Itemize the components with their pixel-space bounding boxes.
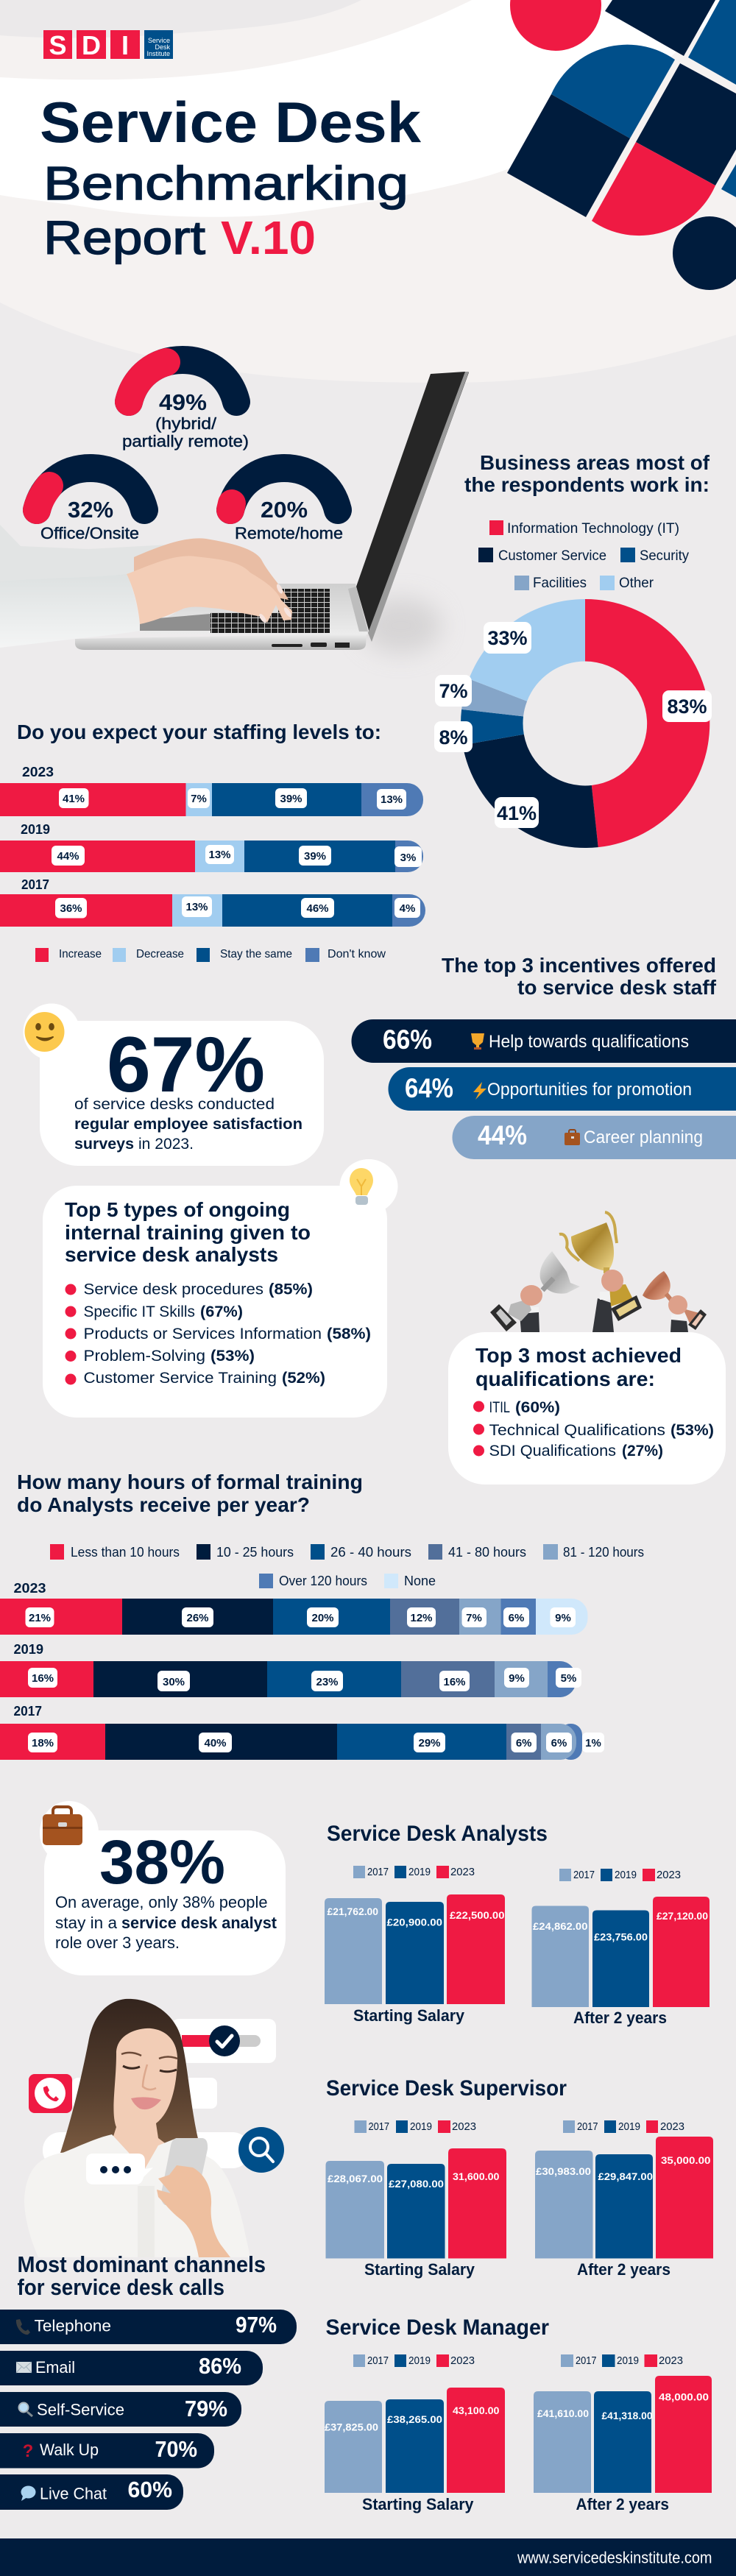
list: qualifications bbox=[473, 1399, 714, 1459]
SDI logo bbox=[43, 30, 173, 60]
ui card: search bbox=[43, 2127, 284, 2173]
legend: 2019 bbox=[408, 1866, 431, 1878]
card: 67% satisfaction surveys: of service desks conducted bbox=[74, 1096, 275, 1113]
chart: analysts starting salary bbox=[325, 1866, 505, 2025]
icon: light bulb bbox=[350, 1168, 373, 1205]
stacked bars: training hours bbox=[0, 1581, 604, 1760]
training 2019: 9% bbox=[509, 1672, 525, 1685]
staffing 2023: 39% bbox=[280, 793, 302, 805]
gold trophy bbox=[559, 1212, 642, 1321]
legend: 2017 bbox=[577, 2120, 598, 2133]
donut label 7%: 7% bbox=[439, 680, 468, 702]
legend: 2023 bbox=[450, 1866, 475, 1878]
channel bar: live chat 60% bbox=[0, 2474, 183, 2510]
list: training types bbox=[65, 1281, 371, 1387]
shape: lower blue square bbox=[721, 164, 736, 197]
donut: IT 83% bbox=[585, 599, 710, 847]
laptop lid edge bbox=[368, 372, 469, 642]
legend: 2017 bbox=[367, 2354, 389, 2367]
chart: supervisor starting salary bbox=[325, 2120, 506, 2279]
card: 38% stay in role: service desk analyst bbox=[121, 1914, 277, 1932]
list: training types: (58%) bbox=[327, 1326, 371, 1342]
laptop base bbox=[75, 634, 367, 650]
back hand bbox=[134, 538, 289, 600]
footer bar bbox=[0, 2538, 736, 2576]
ui card: slider bbox=[171, 2019, 276, 2063]
sleeves bbox=[520, 1298, 688, 1332]
heading: business areas: Business areas most of bbox=[480, 451, 710, 474]
legend: 2019 bbox=[408, 2354, 431, 2367]
training 2017: 6% bbox=[551, 1737, 567, 1749]
staffing 2023: 2023 bbox=[22, 765, 54, 779]
white bump behind bulb bbox=[340, 1159, 397, 1214]
training 2019: 16% bbox=[32, 1672, 54, 1685]
stacked bars: staffing levels bbox=[0, 765, 425, 927]
front sleeve bbox=[0, 574, 140, 648]
icon: trophy bbox=[471, 1033, 484, 1050]
legend: business areas: Security bbox=[640, 548, 689, 564]
staffing 2023 bbox=[0, 765, 423, 816]
keyboard bbox=[210, 589, 330, 633]
legend: 2017 bbox=[368, 2120, 389, 2133]
training 2023: 21% bbox=[29, 1612, 51, 1624]
list: training types: Specific IT Skills bbox=[84, 1303, 195, 1320]
SDI logo: Desk bbox=[155, 43, 170, 51]
training 2017 bbox=[0, 1704, 604, 1760]
list: training types: (67%) bbox=[200, 1303, 243, 1320]
legend: training hours: 10 - 25 hours bbox=[216, 1545, 294, 1560]
chart: manager starting salary: £37,825.00 bbox=[325, 2421, 378, 2433]
legend: business areas: Information Technology (IT) bbox=[507, 521, 679, 537]
channel bar: walk up 70%: Walk Up bbox=[40, 2441, 99, 2459]
list: qualifications: (60%) bbox=[515, 1399, 560, 1416]
card: top 5 training types: service desk analysts bbox=[65, 1243, 278, 1266]
channel bar: email 86% bbox=[0, 2351, 263, 2385]
SDI logo: Institute bbox=[146, 50, 170, 57]
donut label 41% bbox=[495, 797, 539, 828]
training 2019 bbox=[0, 1642, 581, 1697]
chat bubble bbox=[86, 2154, 153, 2184]
incentive bar: promotion 64%: Opportunities for promotion bbox=[487, 1080, 692, 1100]
icon: magnifier bbox=[19, 2402, 32, 2416]
cuffs bbox=[524, 1292, 687, 1320]
incentive bar: promotion 64%: 64% bbox=[405, 1073, 453, 1103]
training 2019: 23% bbox=[316, 1676, 339, 1688]
chart: manager after 2 years: £41,318.00 bbox=[602, 2410, 653, 2421]
gauge: 49% hybrid: partially remote) bbox=[122, 432, 249, 450]
gauge: 20% remote: Remote/home bbox=[235, 524, 343, 542]
card: top 5 training types: Top 5 types of ongoing bbox=[65, 1198, 290, 1221]
card: 38% stay in role bbox=[40, 1801, 286, 1975]
channel bar: email 86%: 86% bbox=[199, 2353, 241, 2379]
legend: business areas: Facilities bbox=[533, 576, 587, 591]
laptop ports bbox=[272, 643, 350, 648]
heading: top 3 incentives: The top 3 incentives offered bbox=[442, 954, 716, 977]
title bbox=[40, 90, 422, 264]
card: 38% stay in role: role over 3 years. bbox=[55, 1933, 180, 1952]
chart: manager starting salary: £38,265.00 bbox=[387, 2413, 442, 2425]
ui card: phone call bbox=[29, 2074, 217, 2113]
heading: service desk manager: Service Desk Manager bbox=[325, 2315, 549, 2340]
legend: 2017 bbox=[576, 2354, 596, 2367]
face and neck bbox=[110, 2028, 177, 2171]
card: 67% satisfaction surveys: 67% bbox=[107, 1020, 265, 1108]
staffing 2019: 3% bbox=[400, 852, 416, 864]
channel bar: telephone 97%: Telephone bbox=[34, 2317, 111, 2335]
heading: dominant channels: for service desk calls bbox=[18, 2274, 224, 2300]
list: qualifications: Technical Qualifications bbox=[489, 1422, 665, 1439]
chart: manager after 2 years bbox=[534, 2354, 712, 2513]
chart: supervisor starting salary: Starting Salary bbox=[364, 2260, 475, 2279]
legend: training hours: 26 - 40 hours bbox=[330, 1545, 411, 1560]
chart: supervisor after 2 years: 35,000.00 bbox=[661, 2154, 711, 2166]
card: 38% stay in role: On average, only 38% people bbox=[55, 1893, 268, 1911]
legend: training hours bbox=[50, 1544, 644, 1588]
hand and arm bbox=[157, 2165, 230, 2257]
laptop and hands photo bbox=[0, 372, 469, 654]
donut label 83% bbox=[662, 690, 712, 722]
shape: red arch bbox=[592, 142, 715, 236]
SDI logo: Service bbox=[148, 37, 170, 44]
list: training types: (53%) bbox=[210, 1348, 255, 1365]
card: top 3 qualifications: qualifications are: bbox=[475, 1367, 655, 1390]
incentive bar: career planning 44%: 44% bbox=[478, 1120, 527, 1150]
heading: business areas: the respondents work in: bbox=[464, 473, 710, 496]
trackpad bbox=[140, 612, 228, 631]
chart: analysts after 2 years: £23,756.00 bbox=[594, 1931, 648, 1943]
list: training types: Problem-Solving bbox=[84, 1348, 205, 1365]
laptop deck bbox=[140, 584, 368, 634]
legend bbox=[353, 1866, 475, 1878]
card: 38% stay in role: stay in a bbox=[55, 1914, 118, 1932]
nose shadow bbox=[143, 2064, 156, 2090]
channel bar: live chat 60%: Live Chat bbox=[40, 2485, 107, 2502]
legend: business areas bbox=[478, 520, 689, 591]
training 2023: 20% bbox=[311, 1612, 334, 1624]
training 2017: 29% bbox=[418, 1737, 441, 1749]
training 2023: 7% bbox=[466, 1612, 482, 1624]
incentive bar: qualifications 66%: Help towards qualifications bbox=[489, 1032, 689, 1052]
training 2017: 1% bbox=[585, 1737, 601, 1749]
SDI logo: S bbox=[49, 30, 67, 60]
channel bar: walk up 70%: 70% bbox=[155, 2436, 197, 2462]
heading: dominant channels: Most dominant channels bbox=[18, 2251, 266, 2277]
legend: 2023 bbox=[660, 2120, 684, 2133]
SDI logo: D bbox=[82, 30, 101, 60]
chart: supervisor starting salary: £28,067.00 bbox=[328, 2173, 383, 2184]
list: training types: (52%) bbox=[282, 1370, 325, 1387]
chart: supervisor after 2 years: After 2 years bbox=[577, 2260, 670, 2279]
SDI logo: I bbox=[121, 30, 129, 60]
chart: analysts starting salary: £22,500.00 bbox=[450, 1909, 505, 1921]
bronze trophy bbox=[643, 1271, 707, 1330]
card: 67% satisfaction surveys bbox=[24, 1004, 324, 1166]
woman with phone illustration bbox=[24, 1999, 284, 2257]
shape: top blue square bbox=[688, 0, 736, 85]
staffing 2017: 2017 bbox=[21, 877, 49, 892]
donut: facilities 7% bbox=[461, 679, 527, 716]
chart: analysts starting salary: Starting Salary bbox=[353, 2006, 465, 2025]
legend: 2019 bbox=[410, 2120, 432, 2133]
training 2017: 40% bbox=[204, 1737, 227, 1749]
staffing 2019 bbox=[0, 822, 423, 872]
chart: supervisor starting salary: 31,600.00 bbox=[453, 2170, 500, 2182]
chart: manager after 2 years: £41,610.00 bbox=[537, 2407, 589, 2419]
channel bar: telephone 97%: 97% bbox=[236, 2312, 277, 2338]
chart: analysts after 2 years: £27,120.00 bbox=[657, 1910, 708, 1922]
title: Service Desk bbox=[40, 90, 422, 155]
donut label 41%: 41% bbox=[497, 802, 537, 824]
heading: training hours bbox=[17, 1471, 363, 1516]
legend: staffing levels bbox=[35, 948, 386, 962]
laptop hinge bbox=[348, 587, 368, 631]
training 2017: 6% bbox=[516, 1737, 532, 1749]
card: 67% satisfaction surveys: in 2023. bbox=[138, 1136, 194, 1153]
shape: right navy square bbox=[636, 63, 736, 185]
staffing 2017: 46% bbox=[306, 902, 329, 915]
icon: briefcase bbox=[565, 1130, 580, 1145]
gauge: 49% hybrid: 49% bbox=[159, 389, 207, 415]
mouth bbox=[131, 2097, 161, 2109]
gauge: 20% remote bbox=[230, 468, 343, 542]
legend bbox=[563, 2120, 684, 2133]
title: V.10 bbox=[221, 211, 316, 264]
legend bbox=[561, 2354, 683, 2367]
hero geometric shapes bbox=[507, 0, 736, 290]
staffing 2019: 2019 bbox=[21, 822, 50, 837]
channel bar: self-service 79%: Self-Service bbox=[37, 2401, 124, 2418]
laptop shadow bbox=[361, 598, 442, 654]
footer bar: www.servicedeskinstitute.com bbox=[517, 2548, 712, 2567]
legend: training hours: None bbox=[404, 1574, 436, 1588]
chart: analysts after 2 years: £24,862.00 bbox=[533, 1920, 588, 1932]
icon: speech balloon bbox=[21, 2486, 35, 2501]
channel bar: telephone 97% bbox=[0, 2310, 297, 2344]
heading: top 3 incentives: to service desk staff bbox=[517, 976, 717, 999]
list: qualifications: (53%) bbox=[670, 1422, 714, 1439]
legend: training hours: 41 - 80 hours bbox=[448, 1545, 526, 1560]
chart: supervisor after 2 years: £30,983.00 bbox=[536, 2165, 591, 2177]
list: training types: Customer Service Training bbox=[84, 1370, 277, 1387]
staffing 2019: 44% bbox=[57, 850, 79, 863]
list: qualifications: ITIL bbox=[489, 1399, 510, 1416]
title: Benchmarking bbox=[43, 157, 408, 210]
legend: staffing levels: Stay the same bbox=[220, 948, 292, 960]
legend: staffing levels: Decrease bbox=[136, 948, 184, 960]
incentive bar: qualifications 66%: 66% bbox=[383, 1025, 432, 1055]
gauge: 49% hybrid: (hybrid/ bbox=[155, 414, 217, 433]
legend: 2019 bbox=[617, 2354, 639, 2367]
heading: business areas bbox=[464, 451, 710, 496]
white bump behind briefcase bbox=[40, 1801, 99, 1864]
card: top 5 training types: internal training given to bbox=[65, 1221, 311, 1244]
heading: training hours: How many hours of formal training bbox=[17, 1471, 363, 1493]
legend: business areas: Other bbox=[619, 576, 654, 591]
donut label 33% bbox=[484, 622, 531, 654]
shape: blue arch bbox=[551, 45, 675, 138]
staffing 2017: 13% bbox=[185, 901, 208, 913]
chart: analysts starting salary: £21,762.00 bbox=[327, 1906, 378, 1917]
incentive bar: qualifications 66% bbox=[352, 1019, 736, 1063]
training 2017: 2017 bbox=[13, 1704, 42, 1719]
heading: training hours: do Analysts receive per year? bbox=[17, 1493, 310, 1516]
chart: manager after 2 years: After 2 years bbox=[576, 2495, 669, 2513]
legend bbox=[353, 2354, 475, 2367]
heading: top 3 incentives bbox=[442, 954, 717, 999]
staffing 2017: 4% bbox=[400, 902, 415, 915]
staffing 2023: 41% bbox=[63, 793, 85, 805]
channel bar: self-service 79% bbox=[0, 2392, 241, 2427]
icon: smiley bbox=[25, 1012, 65, 1052]
training 2019: 2019 bbox=[13, 1642, 43, 1657]
donut label 8%: 8% bbox=[439, 726, 468, 749]
donut label 83%: 83% bbox=[667, 696, 707, 718]
icon: telephone bbox=[16, 2319, 30, 2335]
donut: other 33% bbox=[469, 599, 585, 701]
icon: lightning bbox=[473, 1082, 486, 1100]
title: Report bbox=[43, 211, 205, 264]
donut: customer service 41% bbox=[463, 735, 598, 848]
legend: staffing levels: Increase bbox=[59, 948, 102, 960]
chart: manager starting salary bbox=[325, 2354, 505, 2513]
shape: navy circle bbox=[673, 216, 736, 290]
phone bbox=[161, 2138, 208, 2205]
staffing 2019: 13% bbox=[208, 849, 231, 861]
chart: analysts starting salary: £20,900.00 bbox=[387, 1917, 442, 1928]
legend: 2017 bbox=[573, 1869, 595, 1881]
incentive bar: career planning 44% bbox=[452, 1116, 736, 1159]
gauge: 49% hybrid bbox=[122, 360, 249, 450]
eyes and brows bbox=[121, 2053, 177, 2072]
legend: 2023 bbox=[659, 2354, 683, 2367]
gauge: 32% office bbox=[37, 468, 144, 542]
staffing 2023: 7% bbox=[191, 793, 207, 805]
shirt placket bbox=[138, 2186, 155, 2257]
gauge: 32% office: Office/Onsite bbox=[40, 524, 139, 542]
chart: analysts after 2 years: After 2 years bbox=[573, 2009, 667, 2027]
chart: supervisor after 2 years: £29,847.00 bbox=[598, 2170, 653, 2182]
list: training types: Service desk procedures bbox=[84, 1281, 263, 1298]
shape: red circle bbox=[510, 0, 601, 51]
channel bar: email 86%: Email bbox=[35, 2358, 75, 2377]
legend: 2023 bbox=[450, 2354, 475, 2367]
donut chart: business areas bbox=[434, 599, 712, 848]
laptop lid bbox=[356, 372, 469, 640]
heading: staffing levels: Do you expect your staffing levels to: bbox=[17, 721, 381, 743]
channel bar: walk up 70% bbox=[0, 2433, 214, 2469]
legend: training hours: Over 120 hours bbox=[279, 1574, 367, 1588]
icon: briefcase bbox=[43, 1807, 82, 1845]
legend: business areas: Customer Service bbox=[498, 548, 606, 564]
legend bbox=[559, 1869, 681, 1881]
icon: question mark: ? bbox=[23, 2441, 33, 2461]
training 2023 bbox=[0, 1581, 587, 1635]
card: 38% stay in role: 38% bbox=[99, 1827, 225, 1897]
staffing 2019: 39% bbox=[304, 850, 326, 863]
chart: manager starting salary: 43,100.00 bbox=[453, 2405, 500, 2416]
chart: supervisor starting salary: £27,080.00 bbox=[389, 2178, 444, 2190]
chart: manager starting salary: Starting Salary bbox=[362, 2495, 474, 2513]
back sleeve bbox=[0, 525, 168, 585]
hero background curves bbox=[0, 0, 736, 383]
legend: 2017 bbox=[367, 1866, 389, 1878]
staffing 2017 bbox=[0, 877, 425, 927]
list: training types: Products or Services Information bbox=[84, 1326, 322, 1342]
training 2019: 30% bbox=[163, 1676, 185, 1688]
staffing 2023: 13% bbox=[381, 793, 403, 806]
heading: dominant channels bbox=[18, 2251, 266, 2300]
gauge: 32% office: 32% bbox=[68, 497, 113, 523]
legend: training hours: Less than 10 hours bbox=[71, 1545, 180, 1560]
icon: envelope bbox=[16, 2362, 32, 2373]
legend: 2023 bbox=[452, 2120, 476, 2133]
card: top 3 qualifications bbox=[448, 1332, 726, 1485]
chart: analysts after 2 years bbox=[531, 1869, 710, 2027]
legend: staffing levels: Don't know bbox=[328, 948, 386, 960]
channel bar: live chat 60%: 60% bbox=[128, 2477, 172, 2502]
hair bbox=[60, 1999, 199, 2153]
training 2023: 26% bbox=[186, 1612, 209, 1624]
trophies photo bbox=[490, 1212, 707, 1332]
legend: 2023 bbox=[657, 1869, 681, 1881]
training 2023: 9% bbox=[555, 1612, 571, 1624]
training 2017: 18% bbox=[32, 1737, 54, 1749]
heading: service desk analysts: Service Desk Analysts bbox=[327, 1822, 548, 1846]
legend bbox=[355, 2120, 476, 2133]
card: 67% satisfaction surveys: surveys bbox=[74, 1136, 134, 1153]
card: top 5 training types bbox=[43, 1159, 397, 1418]
list: qualifications: SDI Qualifications bbox=[489, 1443, 616, 1459]
donut label 33%: 33% bbox=[487, 627, 528, 649]
donut: security 8% bbox=[461, 710, 524, 745]
white bump behind emoji bbox=[24, 1004, 79, 1060]
donut label 7% bbox=[435, 675, 472, 707]
silver trophy bbox=[490, 1251, 580, 1331]
shape: top navy square bbox=[605, 0, 715, 56]
legend: 2019 bbox=[615, 1869, 637, 1881]
training 2019: 16% bbox=[443, 1676, 466, 1688]
legend: 2019 bbox=[618, 2120, 640, 2133]
staffing 2017: 36% bbox=[60, 902, 82, 915]
front hand bbox=[127, 556, 292, 624]
list: qualifications: (27%) bbox=[622, 1443, 663, 1459]
shirt bbox=[24, 2134, 250, 2257]
incentive bar: career planning 44%: Career planning bbox=[584, 1128, 703, 1147]
card: top 3 qualifications: Top 3 most achieved bbox=[475, 1344, 682, 1367]
training 2023: 12% bbox=[410, 1612, 433, 1624]
fingernails bbox=[258, 583, 293, 623]
incentive bar: promotion 64% bbox=[389, 1067, 736, 1111]
card: 67% satisfaction surveys: regular employee satisfaction bbox=[74, 1116, 302, 1133]
chart: manager after 2 years: 48,000.00 bbox=[659, 2391, 709, 2402]
training 2023: 2023 bbox=[13, 1581, 46, 1596]
gauge: 20% remote: 20% bbox=[261, 497, 308, 523]
chart: supervisor after 2 years bbox=[535, 2120, 713, 2279]
heading: service desk supervisor: Service Desk Supervisor bbox=[326, 2076, 567, 2101]
training 2019: 5% bbox=[561, 1672, 576, 1685]
shape: left navy square bbox=[507, 94, 630, 217]
list: training types: (85%) bbox=[269, 1281, 313, 1298]
legend: training hours: 81 - 120 hours bbox=[563, 1545, 644, 1560]
channel bar: self-service 79%: 79% bbox=[185, 2396, 227, 2421]
training 2023: 6% bbox=[509, 1612, 524, 1624]
donut label 8% bbox=[434, 721, 473, 752]
